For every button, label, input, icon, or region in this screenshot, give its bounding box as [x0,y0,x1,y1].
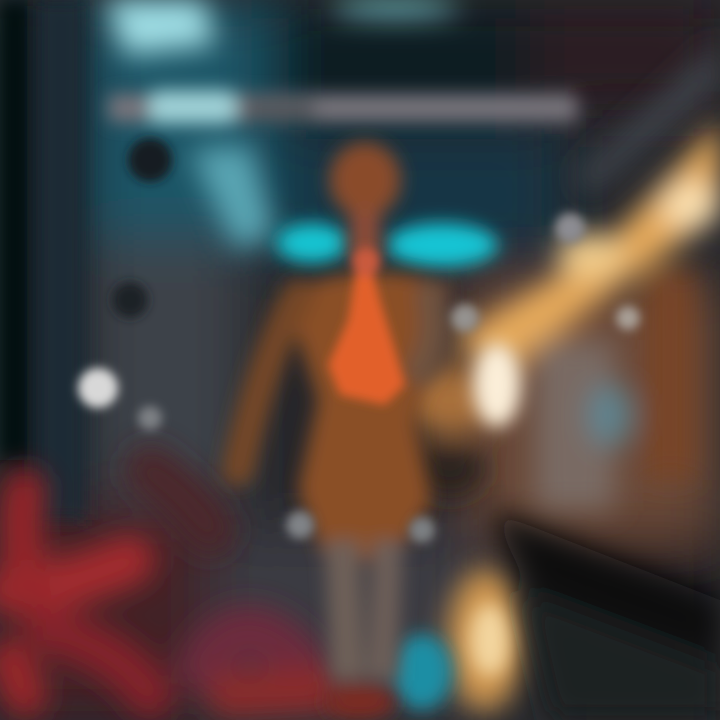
dark railing [490,510,720,720]
far left dark column [0,0,86,520]
ceiling lights [105,0,720,250]
warm lights right [405,120,720,712]
organs [328,245,405,405]
red organic shapes [10,470,320,695]
bright light core [470,343,521,676]
cyan glow behind shoulders [276,223,498,710]
title band [108,90,578,124]
white bokeh spots [78,138,640,543]
human figure [238,142,450,720]
